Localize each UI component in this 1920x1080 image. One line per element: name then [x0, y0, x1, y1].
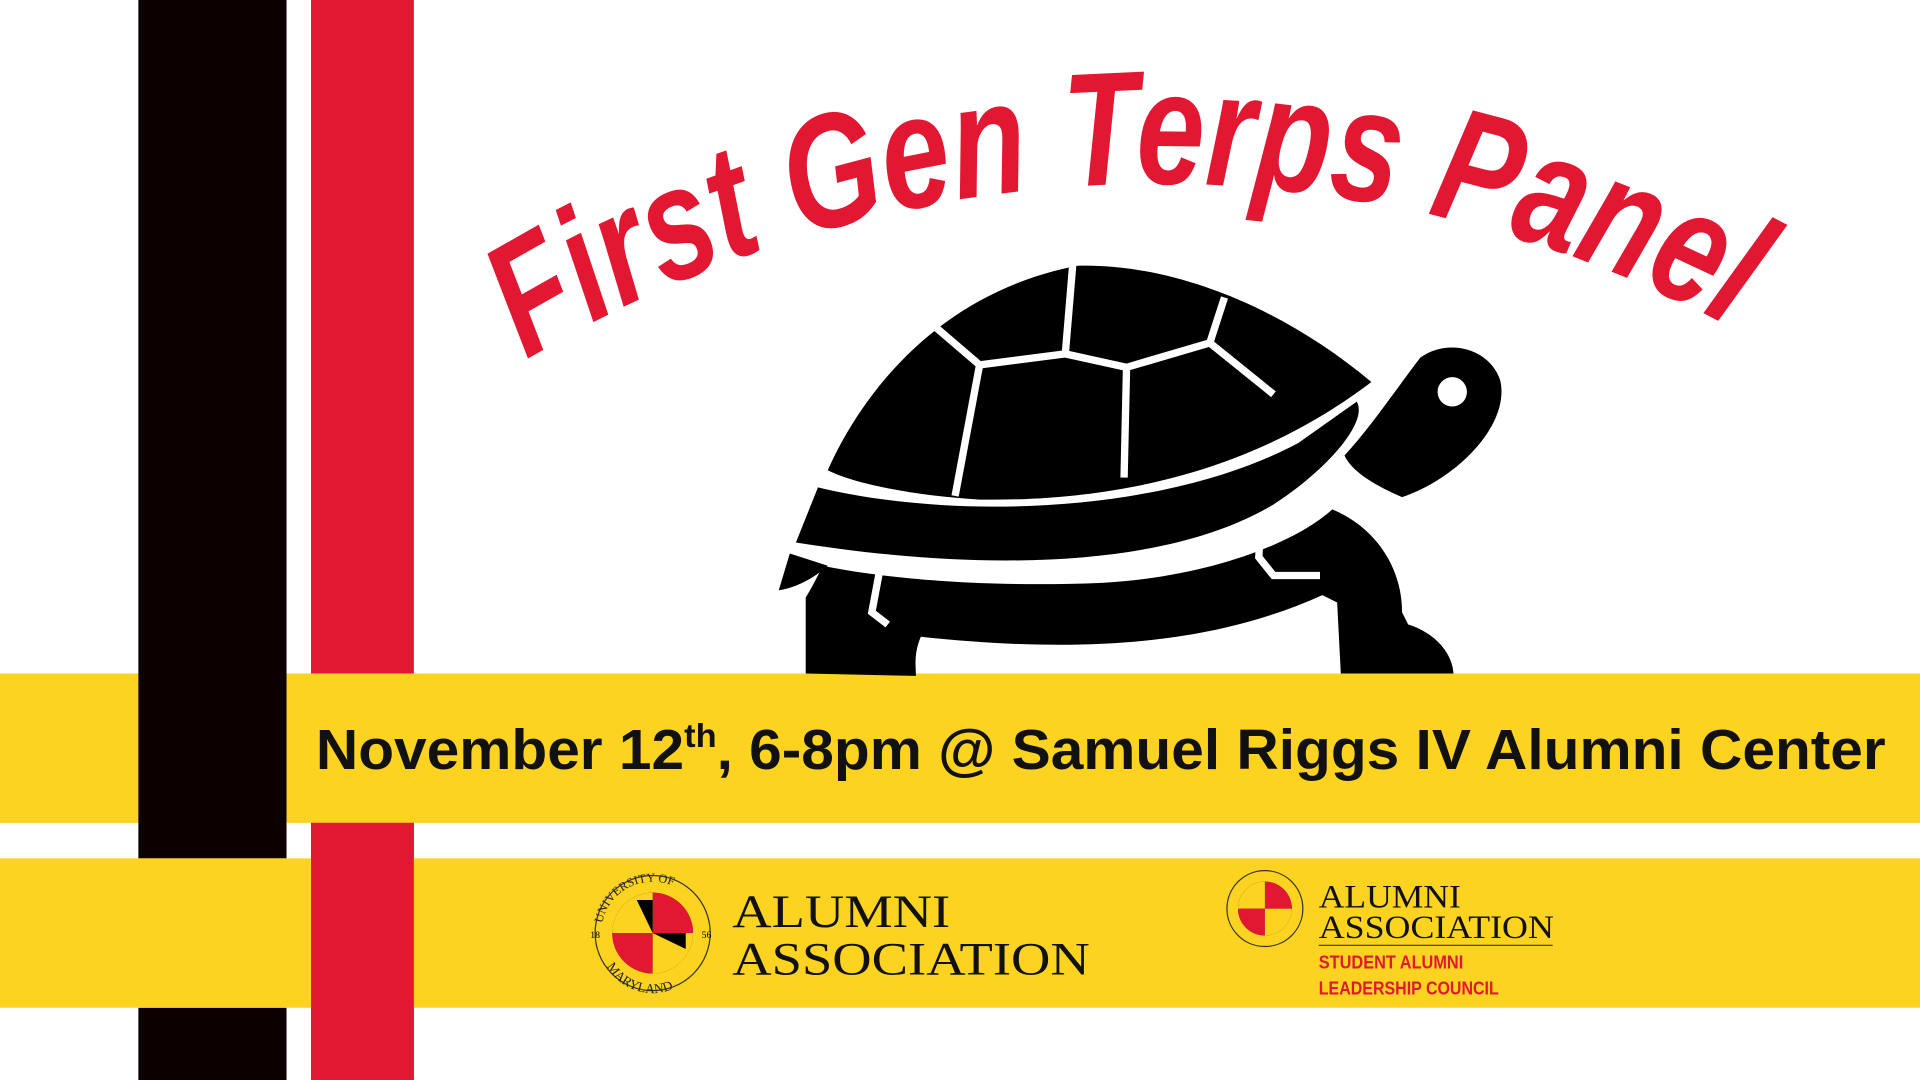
seal: 56	[702, 930, 712, 941]
logo: student alumni leadership council: LEADERSHIP COUNCIL	[1319, 977, 1499, 998]
seal: 18	[590, 930, 600, 941]
icon: turtle	[779, 266, 1501, 676]
shell top	[828, 266, 1371, 500]
logo: student alumni leadership council: ALUMNI	[1319, 879, 1461, 915]
date text: November 12	[316, 718, 670, 781]
seal: MARYLAND	[606, 962, 672, 994]
logo: alumni association: ASSOCIATION	[732, 935, 1090, 986]
red stripe (lower layer)	[311, 0, 414, 1080]
black stripe	[138, 0, 287, 858]
logo: student alumni leadership council: STUDENT ALUMNI	[1319, 952, 1463, 973]
title: First Gen Terps Panel	[488, 72, 1788, 358]
logo: alumni association	[590, 874, 1090, 994]
seal	[590, 874, 712, 994]
date text: th	[684, 718, 717, 755]
tail	[779, 553, 828, 590]
logo: student alumni leadership council: ASSOCIATION	[1319, 910, 1554, 946]
seal: UNIVERSITY OF	[594, 874, 676, 922]
logo: student alumni leadership council	[1227, 871, 1554, 998]
small seal	[1227, 871, 1303, 947]
shell plate lines	[872, 266, 1320, 624]
body and legs	[806, 509, 1453, 676]
shell lower band	[796, 402, 1359, 560]
eye	[1438, 377, 1467, 407]
yellow band: logos	[0, 858, 1920, 1008]
red stripe over logo band	[311, 823, 414, 1080]
date text: , 6-8pm @ Samuel Riggs IV Alumni Center	[717, 718, 1886, 781]
yellow band: date	[0, 673, 1920, 823]
logo text: ALUMNI	[732, 887, 950, 938]
head and neck	[1344, 347, 1501, 497]
